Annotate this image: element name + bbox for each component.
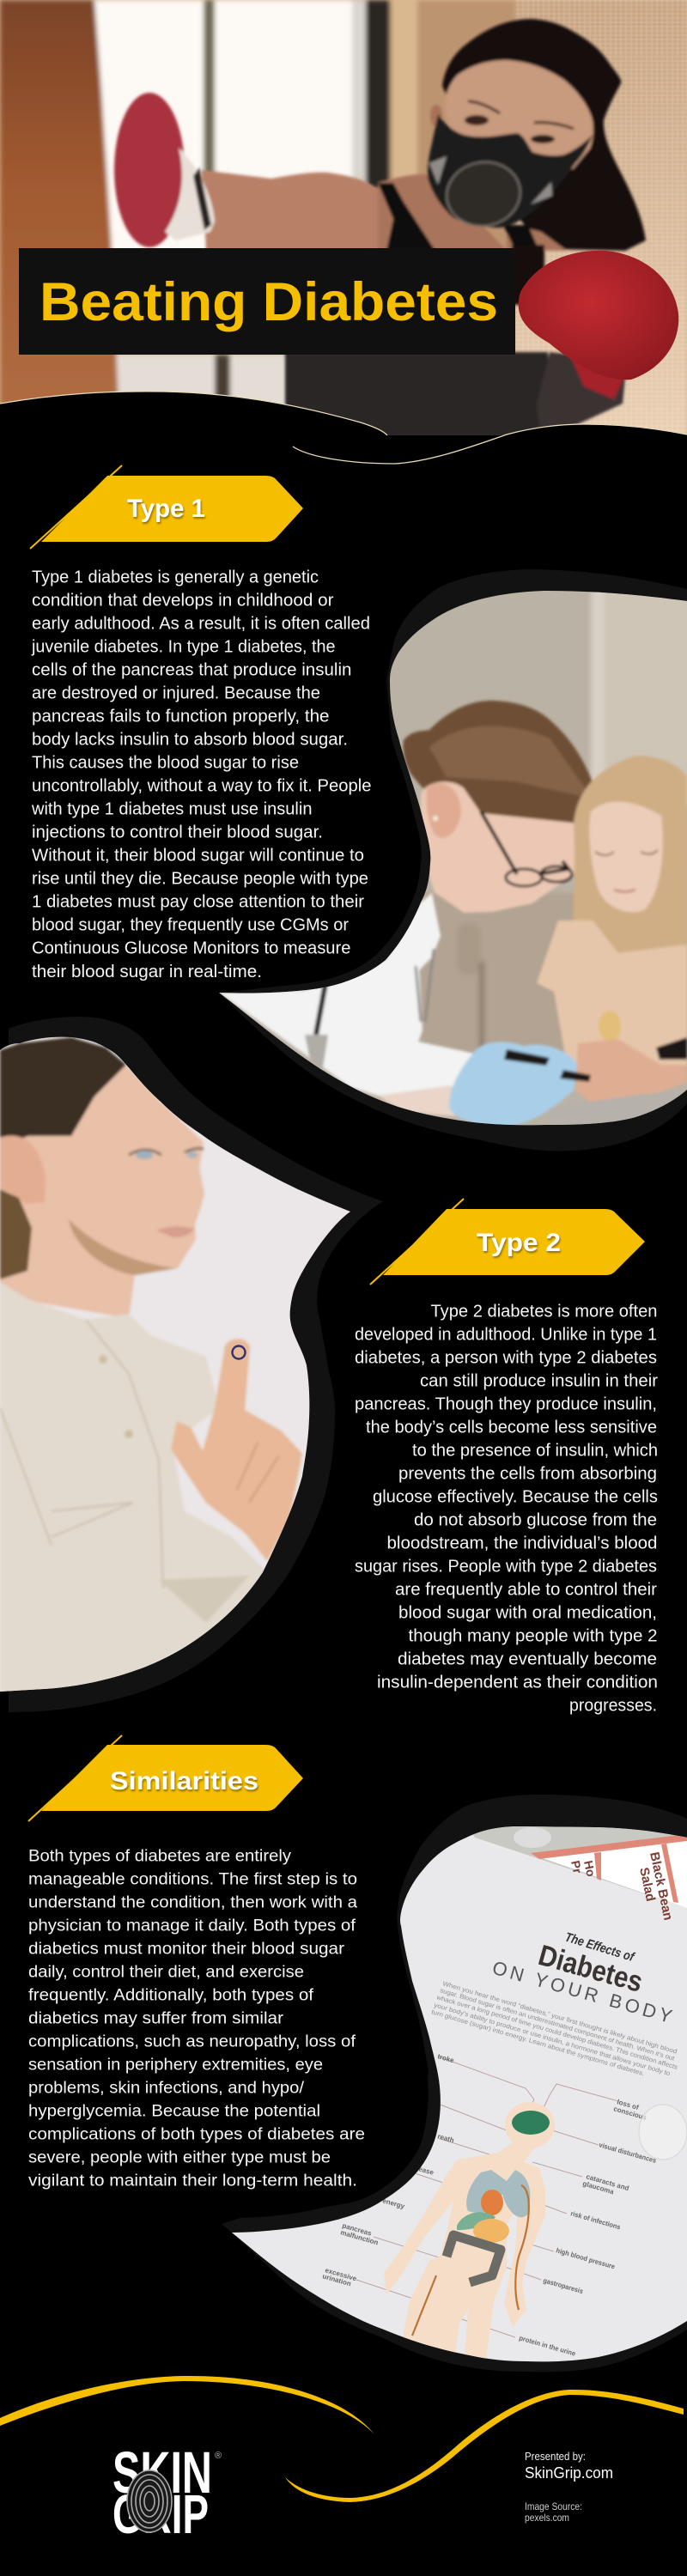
right boxing glove: [519, 251, 678, 380]
text: similarities description: manageable conditions. The first step is to: [28, 1870, 357, 1888]
lancet devices: [504, 1049, 550, 1066]
footer swoosh: left: [0, 2376, 374, 2434]
brain: [512, 2111, 550, 2135]
photo: The Effects of Diabetes poster: Diabetes: [535, 1939, 647, 1999]
text: Type 2 description: pancreas. Though they produce insulin,: [355, 1394, 657, 1413]
text: Type 1 description: cells of the pancreas that produce insulin: [32, 659, 352, 680]
poster paragraph: When you hear the word “diabetes,” your first thought is likely about high blood: [441, 1979, 678, 2056]
text: similarities description: complications, such as neuropathy, loss of: [28, 2032, 356, 2050]
torso below title bar: [285, 352, 548, 438]
doctor's hair: [404, 701, 599, 824]
anatomy labels: high blood pressure: [555, 2246, 617, 2271]
title: Beating Diabetes: [40, 272, 498, 332]
finger mark: [232, 1346, 246, 1358]
text: Type 1 description: rise until they die. Because people with type: [32, 869, 368, 889]
badge: Similarities: [28, 1735, 303, 1821]
text: Type 1 description: body lacks insulin to absorb blood sugar.: [32, 730, 348, 749]
anatomy labels: reath: [436, 2132, 455, 2144]
anatomy labels: cataracts and: [585, 2172, 630, 2192]
text: Type 1 description: early adulthood. As a result, it is often called: [32, 613, 370, 633]
glass object: [639, 2105, 687, 2160]
eyes: [129, 1149, 204, 1155]
text: Type 2 description: blood sugar with oral medication,: [398, 1602, 657, 1623]
text: Type 1 description: uncontrollably, without a way to fix it. People: [32, 776, 371, 796]
text: Type 2 description: glucose effectively. Because the cells: [373, 1486, 658, 1506]
liver: [457, 2212, 495, 2230]
girl's face: [589, 802, 663, 912]
text: similarities description: severe, people with either type must be: [28, 2148, 331, 2166]
anatomy labels: protein in the urine: [518, 2334, 577, 2358]
heart: [481, 2190, 503, 2215]
text: Type 1 description: juvenile diabetes. In type 1 diabetes, the: [31, 636, 335, 656]
text: similarities description: diabetics may suffer from similar: [28, 2009, 284, 2027]
credits: SkinGrip.com: [525, 2464, 613, 2482]
logo: SkinGrip: SKIN: [112, 2439, 212, 2506]
poster paragraph: [430, 1979, 679, 2077]
anatomy labels: urination: [321, 2272, 352, 2287]
anatomy labels: conscious: [612, 2105, 647, 2122]
veins: [412, 2185, 529, 2336]
text: Type 1 description: pancreas fails to function properly, the: [32, 706, 330, 726]
face: [444, 60, 593, 169]
forearm: [378, 1085, 455, 1116]
text: Type 2 description: Type 2 diabetes is more often: [431, 1301, 658, 1321]
logo: SkinGrip: [112, 2439, 222, 2545]
registered mark: ®: [215, 2451, 222, 2461]
leader lines: [356, 2057, 618, 2337]
credits: Presented by:: [525, 2450, 586, 2463]
eyes: [465, 115, 489, 125]
photo: man pointing with marked finger: [0, 1022, 361, 1700]
arm: [202, 170, 392, 251]
sofa: [421, 893, 584, 1065]
tabletop and recipe cards: Pr: [568, 1859, 585, 1875]
ear: [0, 1136, 46, 1204]
text: similarities description: physician to manage it daily. Both types of: [28, 1917, 356, 1935]
badge: Type 1: [30, 465, 303, 549]
text: Type 1 description: Continuous Glucose Monitors to measure: [32, 939, 350, 958]
blue gloves: [449, 1042, 577, 1127]
text: Type 2 description: do not absorb glucose from the: [414, 1510, 657, 1529]
tabletop and recipe cards: Ho: [581, 1859, 599, 1878]
text: Type 2 description: diabetes may eventually become: [398, 1649, 657, 1669]
text: Type 2 description: bloodstream, the individual’s blood: [386, 1534, 658, 1552]
stomach: [473, 2219, 509, 2243]
photo: doctor testing child's blood sugar: [215, 584, 687, 1133]
badge: Type 2: Type 2: [477, 1229, 561, 1257]
anatomy labels: visual disturbances: [598, 2141, 658, 2165]
anatomy figure: [384, 2102, 555, 2366]
text: Type 1 description: their blood sugar in real-time.: [32, 962, 262, 981]
text: Type 2 description: prevents the cells from absorbing: [398, 1463, 657, 1483]
girl's hand: [575, 1039, 687, 1103]
text: Type 2 description: diabetes, a person with type 2 diabetes: [355, 1347, 657, 1367]
badge: Similarities: Similarities: [110, 1767, 258, 1795]
anatomy labels: malfunction: [339, 2228, 380, 2246]
anatomy labels: troke: [436, 2052, 455, 2064]
doctor's coat: [219, 893, 475, 1096]
logo: SkinGrip: GRIP: [112, 2483, 209, 2545]
badge: Type 1: Type 1: [127, 495, 205, 523]
shirt: [0, 1282, 266, 1700]
curly hair: [0, 1189, 32, 1279]
text: Type 2 description: though many people with type 2: [409, 1626, 658, 1645]
tabletop and recipe cards: Salad: [636, 1866, 658, 1903]
fingerprint: [127, 2470, 172, 2532]
table: [556, 1091, 687, 1125]
text: similarities description: Both types of diabetes are entirely: [28, 1847, 292, 1865]
photo frame: man checking finger: [9, 1017, 383, 1712]
stethoscope: [316, 979, 326, 1035]
girl's hair: [573, 756, 687, 971]
poster paragraph: sugar. Blood sugar is often an underestimated component of health. When it’s out: [439, 1986, 676, 2063]
text: similarities description: daily, control their diet, and exercise: [28, 1963, 304, 1981]
text: Type 1 description: injections to control their blood sugar.: [32, 823, 323, 842]
poster paragraph: turn glucose (sugar) into energy. Learn about the symptoms of diabetes.: [430, 2008, 646, 2077]
anatomy labels: ease: [417, 2165, 435, 2177]
mask: [428, 114, 593, 228]
text: Type 2 description: to the presence of insulin, which: [412, 1440, 658, 1460]
title bar: [19, 248, 515, 355]
glasses: [481, 811, 568, 874]
poster paragraph: whack over a long period of time you could develop diabetes. This condition affects: [435, 1993, 679, 2071]
skin: face and neck: [0, 1065, 204, 1318]
wave: black top edge of body: [0, 392, 687, 481]
footer swoosh: right: [285, 2390, 684, 2502]
chest: [378, 174, 507, 251]
anatomy labels: loss of: [616, 2098, 640, 2111]
text: similarities description: complications of both types of diabetes are: [28, 2125, 365, 2143]
text: Type 1 description: 1 diabetes must pay close attention to their: [32, 892, 364, 912]
right glove wrist: [537, 352, 627, 447]
anatomy labels: pancreas: [341, 2221, 373, 2238]
text: similarities description: [28, 1847, 365, 2190]
poster paragraph: your body’s ability to produce or use insulin, a hormone that allows your body to: [433, 2001, 671, 2077]
recipe title: Black Bean: [647, 1850, 676, 1922]
poster title: The Effects of: [563, 1930, 637, 1965]
lungs: [466, 2170, 530, 2217]
text: Type 1 description: Without it, their blood sugar will continue to: [32, 846, 364, 866]
text: Type 1 description: This causes the blood sugar to rise: [32, 752, 299, 773]
strap beside glove: [512, 245, 544, 305]
colon: [447, 2235, 501, 2282]
text: Type 1 description: are destroyed or injured. Because the: [32, 683, 320, 702]
text: similarities description: sensation in periphery extremities, eye: [28, 2056, 323, 2074]
text: Type 2 description: insulin-dependent as their condition: [377, 1673, 658, 1692]
anatomy labels: risk of infections: [569, 2209, 622, 2232]
text: Type 2 description: progresses.: [569, 1696, 657, 1716]
badge: Type 2: [370, 1199, 645, 1285]
text: Type 1 description: with type 1 diabetes must use insulin: [31, 799, 313, 819]
text: Type 2 description: sugar rises. People with type 2 diabetes: [355, 1556, 657, 1577]
anatomy labels: energy: [381, 2196, 406, 2210]
text: similarities description: understand the condition, then work with a: [28, 1893, 357, 1911]
text: Type 1 description: Type 1 diabetes is generally a genetic: [32, 567, 319, 586]
credits: Image Source:: [525, 2500, 582, 2512]
text: similarities description: diabetics must monitor their blood sugar: [28, 1940, 345, 1958]
anatomy labels: gastroparesis: [542, 2276, 585, 2295]
hand: [171, 1339, 302, 1561]
text: Type 2 description: are frequently able to control their: [395, 1580, 657, 1599]
text: Type 1 description: blood sugar, they frequently use CGMs or: [32, 915, 349, 935]
wrist wrap: [165, 148, 215, 240]
girl's dress: [537, 920, 687, 1065]
text: Type 1 description: [31, 567, 372, 981]
text: similarities description: problems, skin infections, and hypo/: [28, 2079, 305, 2097]
text: similarities description: hyperglycemia. Because the potential: [28, 2102, 320, 2120]
text: Type 2 description: developed in adulthood. Unlike in type 1: [355, 1324, 657, 1344]
anatomy labels: excessive: [324, 2266, 358, 2282]
text: similarities description: frequently. Additionally, both types of: [28, 1986, 314, 2004]
hair: [0, 1037, 126, 1146]
photo: The Effects of Diabetes poster: [223, 1820, 687, 2370]
text: Type 1 description: condition that develops in childhood or: [32, 590, 334, 610]
credits: [525, 2450, 613, 2524]
doctor's face: [421, 782, 587, 913]
photo frame: doctor and child: [219, 569, 687, 1151]
back hair: [442, 19, 646, 251]
text: Type 2 description: [355, 1301, 658, 1716]
tabletop and recipe cards: [473, 1826, 687, 1920]
photo: The Effects of Diabetes poster: ON YOUR BODY: [490, 1957, 675, 2027]
text: Type 2 description: the body’s cells become less sensitive: [366, 1417, 657, 1437]
lips: [156, 1226, 194, 1237]
credits: pexels.com: [525, 2512, 569, 2524]
hero photo: boxer punching a bag: [0, 0, 687, 447]
anatomy labels: [321, 2052, 658, 2358]
photo frame: diabetes poster: [222, 1795, 687, 2372]
text: similarities description: vigilant to maintain their long-term health.: [28, 2172, 357, 2190]
tank top: [378, 183, 435, 251]
anatomy labels: glaucoma: [581, 2179, 615, 2196]
left glove: [114, 93, 185, 247]
text: Type 2 description: can still produce insulin in their: [420, 1370, 658, 1390]
